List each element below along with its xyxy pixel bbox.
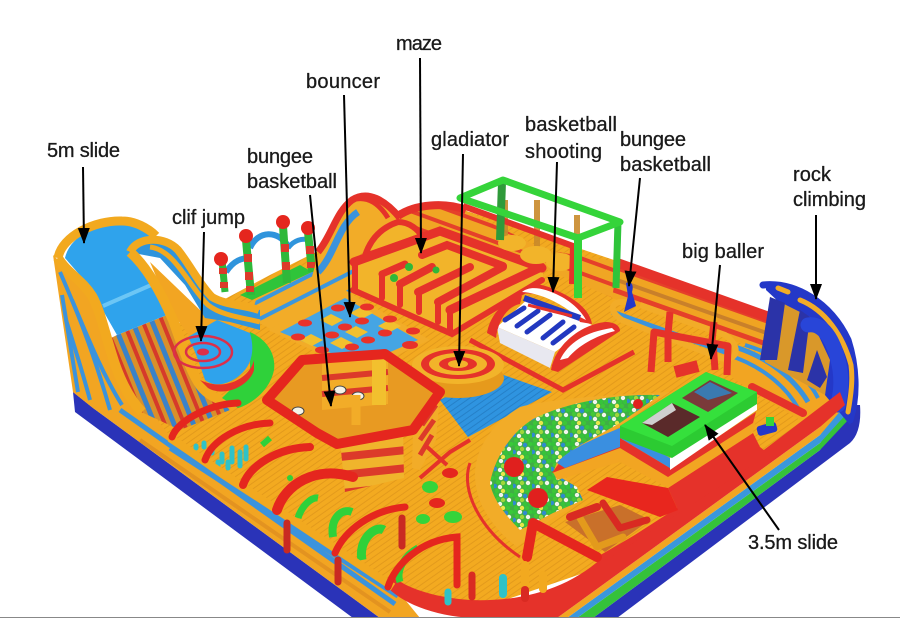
label: bungee basketball right: bungee [620, 129, 686, 151]
ball pit ring [475, 392, 670, 547]
label: 5m slide: 5m slide [47, 140, 120, 162]
stairs [527, 503, 647, 557]
label: bungee basketball right [620, 129, 711, 286]
bouncer [268, 290, 430, 372]
filler behind ramp [150, 262, 240, 350]
bottom edge line [0, 617, 900, 618]
label: clif jump [172, 207, 245, 341]
disc [188, 320, 252, 384]
green crescent [222, 332, 274, 408]
central right floor border [470, 340, 634, 390]
label: bouncer: bouncer [306, 71, 380, 93]
outer right side bands [557, 390, 860, 618]
hole one [642, 403, 700, 437]
side pillar [412, 392, 440, 470]
back wave slide [310, 196, 400, 284]
label: bungee basketball left: basketball [247, 171, 337, 193]
ball pit [467, 392, 670, 557]
label: basketball shooting: basketball [525, 114, 617, 136]
blue floor [440, 372, 552, 437]
front pins [448, 565, 543, 602]
ring [613, 302, 736, 359]
outer left side bands [73, 392, 420, 618]
bed [497, 297, 592, 352]
left arc [487, 296, 522, 338]
label: rock climbing: climbing [793, 189, 866, 211]
tunnel under slide [107, 315, 230, 430]
rock climbing [760, 285, 856, 425]
blue chute [557, 428, 670, 468]
back wall right [612, 258, 772, 354]
label: bungee basketball left [247, 146, 337, 406]
big baller [651, 312, 728, 375]
label: 3.5m slide: 3.5m slide [748, 532, 838, 554]
label: big baller [682, 241, 764, 359]
label: basketball shooting [525, 114, 617, 292]
label: rock climbing [793, 164, 866, 299]
right floor strips [612, 312, 835, 420]
label: rock climbing: rock [793, 164, 832, 186]
floor dots [416, 468, 462, 524]
back arc [519, 284, 592, 324]
red side rail band [388, 392, 845, 618]
3.5m slide [527, 372, 770, 560]
left red arches [172, 403, 457, 587]
ramp stripes [128, 239, 260, 330]
striped block [340, 428, 404, 492]
label: bouncer [306, 71, 380, 317]
octagon bungee basketball [267, 354, 440, 492]
label: maze: maze [396, 33, 442, 55]
back wall red top [398, 205, 466, 216]
left back stripes [250, 245, 358, 335]
label: bungee basketball left: bungee [247, 146, 313, 168]
label: 5m slide [47, 140, 120, 243]
back wall middle [398, 206, 620, 300]
green top [620, 372, 757, 458]
red tube [267, 354, 440, 444]
green rings [262, 438, 418, 582]
bungee basketball right [613, 282, 736, 359]
small blue toy [756, 417, 778, 436]
label: 3.5m slide [705, 425, 838, 554]
target rings [174, 336, 232, 368]
tower stripes [53, 255, 170, 440]
red slope [597, 433, 770, 560]
label: gladiator: gladiator [431, 129, 509, 151]
label: clif jump: clif jump [172, 207, 245, 229]
dotted panels [760, 297, 827, 388]
teal pillars [196, 443, 246, 468]
slide [53, 221, 240, 440]
hole two [682, 380, 738, 412]
clif jump [128, 239, 274, 408]
left yellow rail [170, 438, 393, 587]
disc red side [200, 360, 254, 392]
red wedge arch [587, 477, 678, 517]
second rim [130, 240, 259, 310]
label: bungee basketball right: basketball [620, 154, 711, 176]
figure [624, 282, 636, 312]
maze gable [365, 222, 422, 256]
short red rail [752, 387, 803, 413]
slide blue surface [65, 223, 167, 335]
posts and cans [292, 407, 304, 415]
arch gate [214, 215, 315, 300]
green frame [460, 180, 620, 298]
white band [670, 403, 757, 470]
red layer [552, 412, 756, 477]
maze [352, 222, 543, 335]
label: big baller: big baller [682, 241, 764, 263]
inner floor [270, 355, 437, 440]
floor red lines [420, 440, 470, 478]
label: basketball shooting: shooting [525, 141, 602, 163]
basketball shooting [487, 284, 620, 372]
gladiator [412, 346, 504, 398]
orange layer [553, 420, 756, 488]
under-arch gap [565, 505, 650, 552]
balls [490, 395, 660, 530]
label: gladiator [431, 129, 509, 366]
slide highlight [103, 282, 158, 306]
slide rim [58, 221, 156, 258]
front arc [551, 322, 620, 372]
inflatable park floor [110, 210, 850, 612]
